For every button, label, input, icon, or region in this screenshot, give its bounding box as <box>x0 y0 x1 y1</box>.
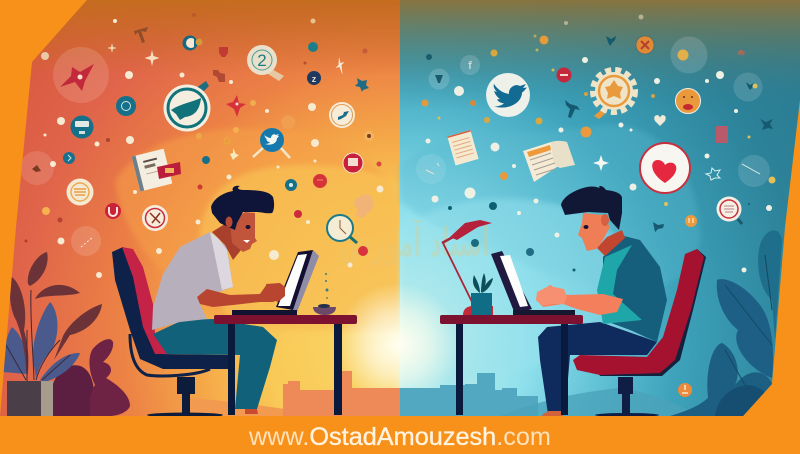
icon: heart badge <box>640 143 690 193</box>
neck right <box>597 230 625 256</box>
ear right <box>601 214 609 226</box>
floating dots left <box>41 18 384 278</box>
icon: chart ring badge <box>329 102 355 128</box>
icon: twitter badge <box>253 128 290 158</box>
website url: www.OstadAmouzesh.com <box>248 423 551 451</box>
icon: z badge <box>307 71 321 85</box>
icon: patterned card <box>716 126 728 143</box>
neck left <box>212 222 241 260</box>
icon: magnifier number: 2 <box>257 51 267 70</box>
eye left <box>246 225 250 229</box>
icon: small red tag <box>219 47 228 57</box>
icon: orange cross badge <box>636 36 654 54</box>
shoe right <box>542 411 563 416</box>
icon: small teal splat <box>426 54 432 60</box>
arm right <box>537 285 623 315</box>
icon: faded bird circle <box>734 72 762 102</box>
smile left <box>243 240 250 243</box>
icon: list magnifier <box>716 196 742 224</box>
icon: C badge <box>182 36 202 50</box>
shirt left <box>152 232 233 330</box>
icon: twitter bird badge <box>486 73 530 117</box>
chair left <box>112 247 230 418</box>
desk lamp <box>442 220 493 315</box>
icon: faded tools circle <box>416 154 446 184</box>
icon: emoji face <box>676 88 700 114</box>
icon: heart red badge <box>313 174 327 188</box>
icon: red book <box>157 162 181 179</box>
laptop right <box>491 251 575 315</box>
icon: sketch hand <box>354 194 373 218</box>
icon: location pin <box>367 134 371 138</box>
icon: star badge <box>53 47 109 103</box>
icon: orange download badge <box>678 383 692 397</box>
icon: sparkle 2 <box>144 50 160 66</box>
icon: small red mark <box>737 51 745 55</box>
left warm background <box>0 0 400 416</box>
icon: teal splat <box>355 78 369 92</box>
icon: big leaf badge <box>164 81 210 132</box>
right cool background <box>400 0 800 416</box>
watermark: استاد آموزش <box>340 217 490 266</box>
accent dots left <box>24 13 382 256</box>
icon: monitor badge <box>70 116 94 138</box>
arm left <box>197 284 285 307</box>
potted plant <box>471 273 493 315</box>
floating dots right <box>426 14 772 272</box>
shirt front right <box>597 245 642 324</box>
collar left <box>210 232 233 290</box>
icon: magnifier number <box>247 45 284 81</box>
icon: magnet badge <box>105 203 121 219</box>
center sun glow <box>342 286 455 388</box>
icon: teal dot badge <box>308 42 318 52</box>
icon: faded wand circle <box>738 155 770 187</box>
icon: monitor red badge <box>343 153 363 173</box>
icon: orange pause badge <box>685 215 697 227</box>
laptop left <box>232 250 319 315</box>
ground left <box>190 398 283 416</box>
icon: red star <box>226 95 246 117</box>
plant right <box>670 230 782 416</box>
face right <box>578 213 610 251</box>
icon: bird tool <box>606 36 616 46</box>
chair right <box>573 249 706 417</box>
icon: sparkle right <box>593 155 609 171</box>
icon: teal zero badge <box>285 179 297 191</box>
pants left <box>153 319 277 409</box>
desk right <box>440 315 583 415</box>
icon: small teal badge <box>63 152 75 164</box>
hair right <box>561 186 622 230</box>
plant pot left <box>7 381 53 416</box>
ear left <box>226 216 232 228</box>
city silhouette left <box>283 371 400 416</box>
pants right <box>538 322 657 414</box>
icon: clock magnifier <box>327 215 357 243</box>
bush left <box>50 339 130 416</box>
icon: faded circle bee <box>20 151 54 185</box>
icon: teal figure <box>653 222 664 232</box>
city silhouette right <box>400 373 538 416</box>
icon: puzzle marks <box>213 70 225 82</box>
hair left <box>211 186 274 230</box>
man left <box>112 186 285 418</box>
shirt right <box>603 235 667 342</box>
hand right <box>536 286 567 306</box>
brown leaves <box>10 252 102 380</box>
hills right <box>538 388 688 416</box>
icon: O badge <box>116 96 136 116</box>
desk left <box>214 315 357 415</box>
icon: faded cup badge <box>428 68 450 90</box>
icon: gear menu <box>66 178 94 206</box>
eye right <box>584 225 588 229</box>
icon: faded orange circle <box>670 36 708 74</box>
icon: cross tool teal <box>565 100 580 118</box>
icon: tool cross <box>134 27 148 43</box>
icon: target <box>224 138 230 144</box>
icon: open book <box>523 141 575 182</box>
icon: white heart <box>654 115 666 126</box>
blue leaves <box>3 302 80 382</box>
icon: cross tool right <box>760 119 773 130</box>
icon: small star outline <box>230 148 239 160</box>
man right <box>537 186 706 417</box>
icon: small faded sparkle circle <box>71 226 101 256</box>
icon: calendar notebook <box>132 149 172 192</box>
accent dots right <box>422 36 776 272</box>
hand left <box>266 283 285 302</box>
icon: facebook faded badge: f <box>468 60 472 72</box>
plant left <box>3 252 130 416</box>
icon: gear star <box>593 70 635 119</box>
icon: z badge: z <box>312 74 317 84</box>
icon: red badge <box>556 68 572 82</box>
icon: note paper <box>447 130 479 165</box>
face left <box>230 212 257 252</box>
icon: star outline <box>706 168 720 180</box>
icon: blocked tools <box>142 205 168 231</box>
icon: sparkle <box>336 57 344 75</box>
icon: sparkle 3 <box>107 43 117 53</box>
bowl and steam <box>313 273 336 315</box>
shoe left <box>245 409 258 414</box>
plant stems <box>6 290 70 381</box>
icon: facebook faded badge <box>460 55 480 75</box>
